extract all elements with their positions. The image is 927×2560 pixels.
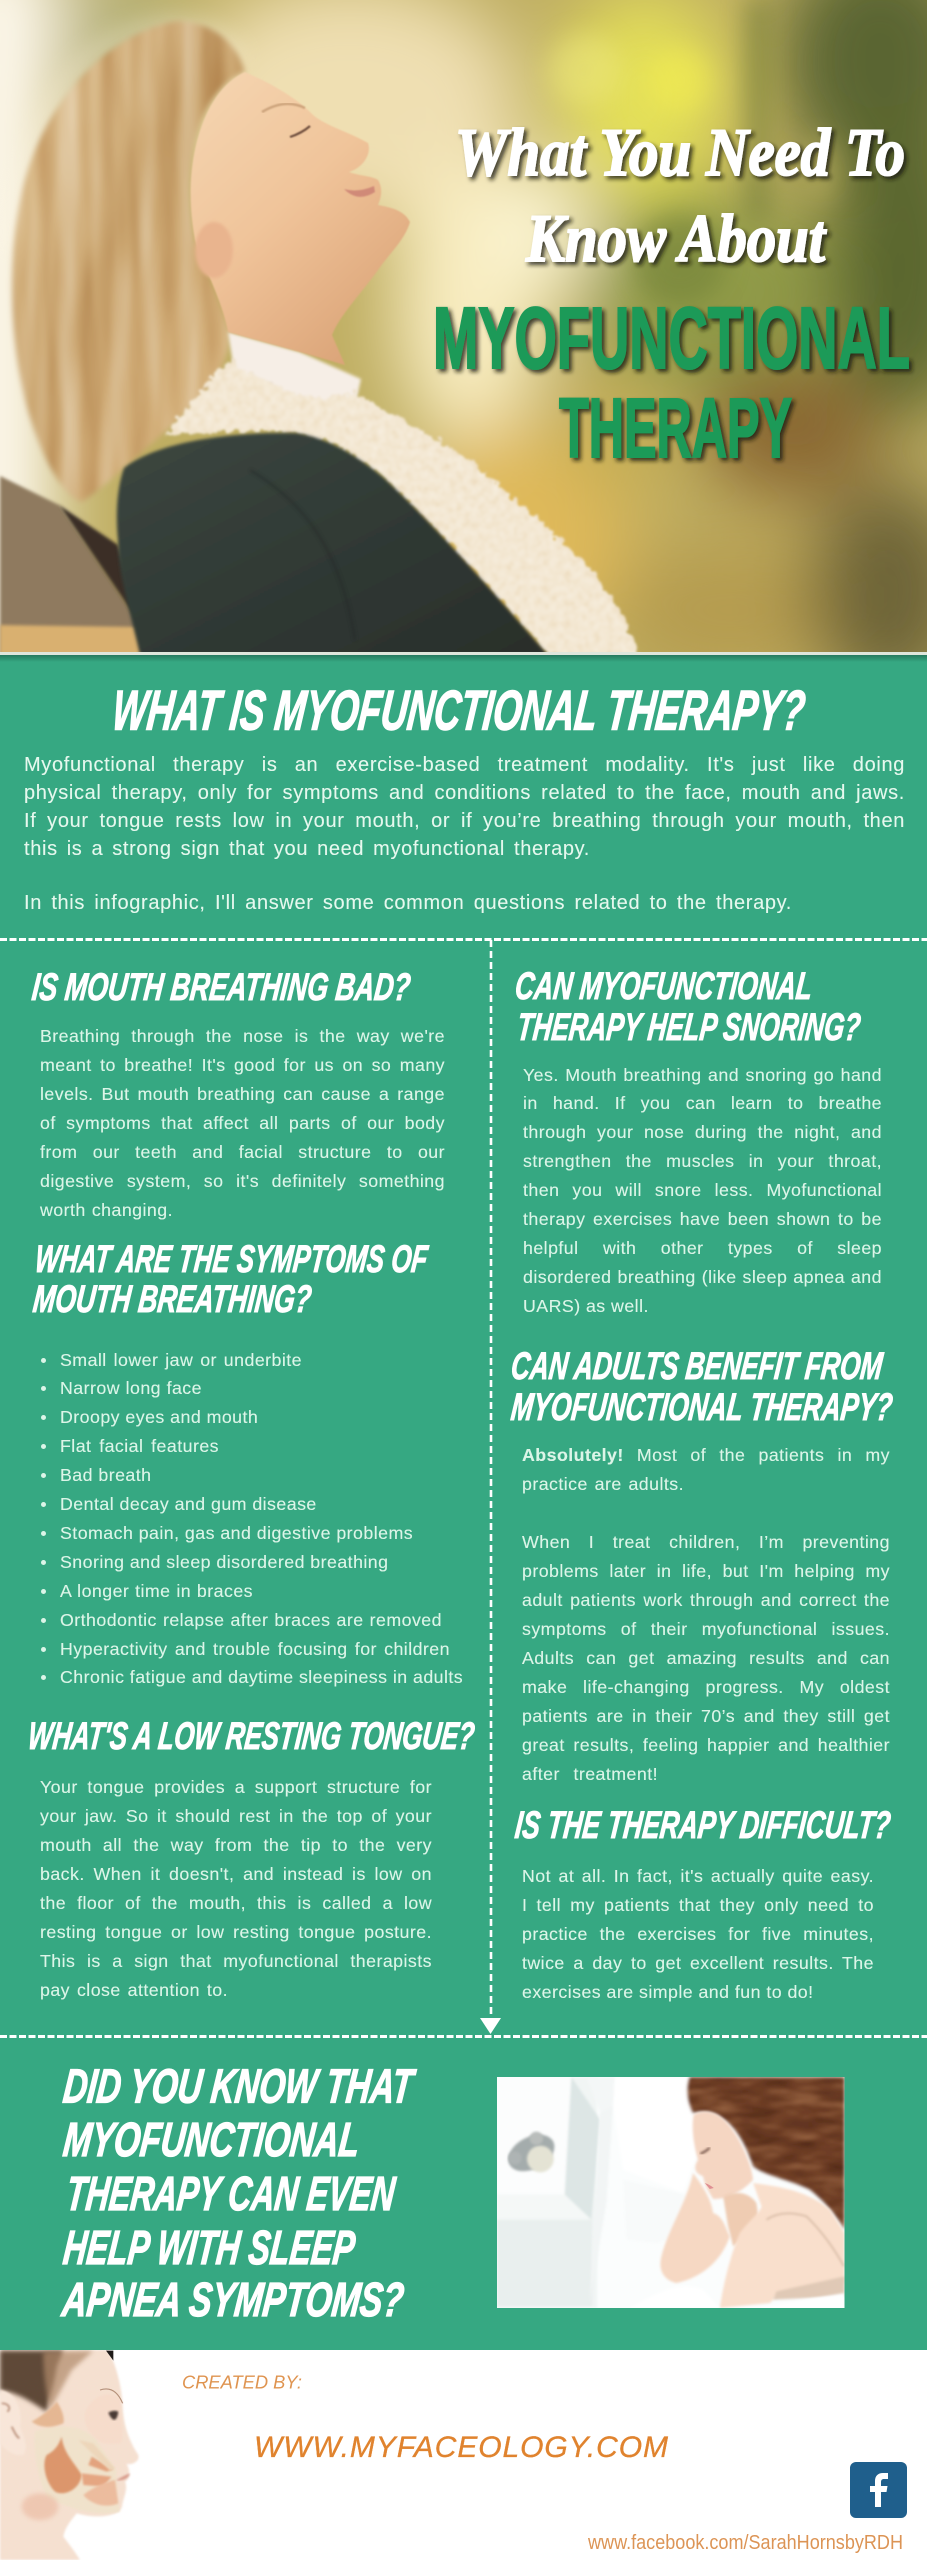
alarm clock (506, 2130, 556, 2174)
paragraph: of symptoms that affect all parts of our body (40, 1112, 445, 1132)
paragraph: great results, feeling happier and healthier (522, 1734, 890, 1754)
arm and shoulder (660, 2173, 730, 2283)
panel: is the therapy difficult (513, 1804, 893, 2002)
paragraph: the floor of the mouth, this is called a low (40, 1892, 432, 1912)
facebook link: www.facebook.com/SarahHornsbyRDH (587, 2532, 903, 2554)
hair (0, 2351, 63, 2412)
heading: MOUTH BREATHING? (31, 1278, 314, 1321)
intro text: If your tongue rests low in your mouth, or if you’re breathing through your mouth, then (24, 810, 905, 832)
bed edge and pillow (599, 2108, 611, 2235)
intro text (24, 754, 905, 914)
paragraph (523, 1064, 882, 1316)
paragraph: therapy exercises have been shown to be (523, 1209, 882, 1229)
dark jacket (117, 433, 548, 655)
paragraph: Absolutely! Most of the patients in my (522, 1444, 890, 1464)
neck shade (22, 2493, 58, 2520)
symptom list: A longer time in braces (60, 1581, 253, 1601)
paragraph: I tell my patients that they only need to (522, 1895, 874, 1915)
panel: can therapy help snoring (513, 965, 882, 1316)
woman (12, 21, 640, 655)
intro text: In this infographic, I'll answer some common questions related to the therapy. (24, 892, 792, 914)
paragraph: practice the exercises for five minutes, (522, 1924, 874, 1944)
paragraph: This is a sign that myofunctional therapists (40, 1950, 432, 1970)
footer panel (0, 2350, 927, 2560)
heading (31, 1238, 431, 1321)
paragraph: mouth all the way from the tip to the very (40, 1834, 432, 1854)
nightstand (497, 2077, 600, 2308)
masseter muscle (44, 2437, 82, 2493)
green content panel background (0, 655, 927, 2350)
paragraph: UARS) as well. (523, 1296, 649, 1316)
symptom list: Snoring and sleep disordered breathing (60, 1552, 388, 1572)
panel: can adults benefit (509, 1345, 895, 1784)
panel: is mouth breathing bad (30, 966, 445, 1220)
hero photo with title (0, 0, 927, 655)
paragraph: Adults can get amazing results and can (522, 1648, 890, 1668)
paragraph (522, 1862, 874, 2007)
heading: WHAT'S A LOW RESTING TONGUE? (26, 1715, 477, 1758)
eye region (85, 2395, 122, 2444)
symptom list: Bad breath (60, 1465, 152, 1485)
symptom list: Droopy eyes and mouth (60, 1407, 258, 1427)
paragraph: through your nose during the night, and (523, 1122, 882, 1142)
cheek muscle plate (114, 2510, 120, 2514)
paragraph: disordered breathing (like sleep apnea and (523, 1267, 882, 1287)
hair (688, 2077, 844, 2230)
callout: did you know: APNEA SYMPTOMS? (59, 2273, 407, 2327)
heading: WHAT ARE THE SYMPTOMS OF (33, 1238, 431, 1281)
paragraph (40, 1776, 432, 2000)
heading (513, 965, 863, 1049)
hero title: Know About: Know About (525, 200, 827, 276)
paragraph: back. When it doesn't, and instead is low on (40, 1864, 432, 1884)
intro text: this is a strong sign that you need myofunctional therapy. (24, 838, 590, 860)
symptom list: Small lower jaw or underbite (60, 1350, 302, 1370)
paragraph: digestive system, so it's definitely something (40, 1170, 445, 1190)
paragraph: pay close attention to. (40, 1980, 228, 2000)
callout: did you know: DID YOU KNOW THAT (61, 2060, 418, 2114)
face (693, 2112, 753, 2199)
intro text: physical therapy, only for symptoms and conditions related to the face, mouth and jaws. (24, 782, 905, 804)
paragraph (40, 1026, 445, 1220)
ear (0, 2390, 26, 2455)
paragraph: twice a day to get excellent results. The (522, 1953, 874, 1973)
paragraph: in hand. If you can learn to breathe (523, 1093, 882, 1113)
paragraph (522, 1444, 890, 1784)
paragraph: resting tongue or low resting tongue posture. (40, 1922, 432, 1942)
paragraph: symptoms of their myofunctional issues. (522, 1618, 890, 1638)
created by label: CREATED BY: (182, 2372, 302, 2392)
lips (117, 2473, 130, 2481)
intro text: Myofunctional therapy is an exercise-based treatment modality. It's just like doing (24, 754, 905, 776)
symptom list: Dental decay and gum disease (60, 1494, 317, 1514)
symptom list: Narrow long face (60, 1378, 202, 1398)
paragraph: exercises are simple and fun to do! (522, 1982, 814, 2002)
face and neck (191, 72, 410, 365)
hero bottom edge (0, 652, 927, 655)
callout: did you know: MYOFUNCTIONAL (61, 2113, 363, 2167)
photo: woman sleeping (497, 2077, 844, 2308)
symptom list: Chronic fatigue and daytime sleepiness in adults (60, 1667, 463, 1687)
website url: WWW.MYFACEOLOGY.COM (254, 2431, 668, 2464)
paragraph: practice are adults. (522, 1474, 684, 1494)
callout: did you know (61, 2060, 413, 2322)
fur collar (166, 358, 640, 655)
panel: symptoms of mouth breathing (31, 1238, 463, 1687)
hair (12, 21, 245, 502)
panel: low resting tongue (26, 1715, 477, 2000)
paragraph: meant to breathe! It's good for us on so many (40, 1054, 445, 1074)
mouth muscles (82, 2473, 112, 2487)
paragraph: Not at all. In fact, it's actually quite easy. (522, 1866, 874, 1886)
neck and face skin (0, 2350, 139, 2560)
temporal muscle (32, 2402, 64, 2427)
symptom list: Stomach pain, gas and digestive problems (60, 1523, 413, 1543)
paragraph: patients are in their 70’s and they still get (522, 1706, 890, 1726)
paragraph: levels. But mouth breathing can cause a range (40, 1084, 445, 1104)
callout: did you know: HELP WITH SLEEP (61, 2221, 358, 2275)
symptom list (41, 1350, 463, 1687)
panel: what is myofunctional therapy (24, 679, 905, 914)
heading (509, 1345, 895, 1429)
paragraph: problems later in life, but I'm helping my (522, 1560, 890, 1580)
blurred bokeh background (0, 0, 927, 720)
bench (0, 476, 142, 655)
paragraph: strengthen the muscles in your throat, (523, 1151, 882, 1171)
symptom list: Orthodontic relapse after braces are removed (60, 1610, 442, 1630)
paragraph: Yes. Mouth breathing and snoring go hand (523, 1064, 882, 1084)
hair halo (44, 11, 241, 122)
paragraph: Breathing through the nose is the way we're (40, 1026, 445, 1046)
paragraph: from our teeth and facial structure to our (40, 1142, 445, 1162)
paragraph: worth changing. (40, 1200, 173, 1220)
illustration: face with muscles (0, 2350, 140, 2560)
white turtleneck (228, 332, 361, 440)
paragraph: When I treat children, I’m preventing (522, 1532, 890, 1552)
icon: facebook (850, 2462, 907, 2518)
symptom list: Hyperactivity and trouble focusing for children (60, 1639, 450, 1659)
callout: did you know: THERAPY CAN EVEN (64, 2167, 398, 2221)
paragraph: adult patients work through and correct the (522, 1590, 890, 1610)
paragraph: after treatment! (522, 1764, 658, 1784)
paragraph: your jaw. So it should rest in the top of your (40, 1806, 432, 1826)
symptom list: Flat facial features (60, 1436, 219, 1456)
paragraph: then you will snore less. Myofunctional (523, 1180, 882, 1200)
paragraph: Your tongue provides a support structure for (40, 1776, 432, 1796)
paragraph: helpful with other types of sleep (523, 1238, 882, 1258)
paragraph: make life-changing progress. My oldest (522, 1676, 890, 1696)
heading: IS MOUTH BREATHING BAD? (30, 966, 413, 1009)
sheet (808, 2292, 844, 2300)
arrow: down to next section (480, 2018, 501, 2034)
